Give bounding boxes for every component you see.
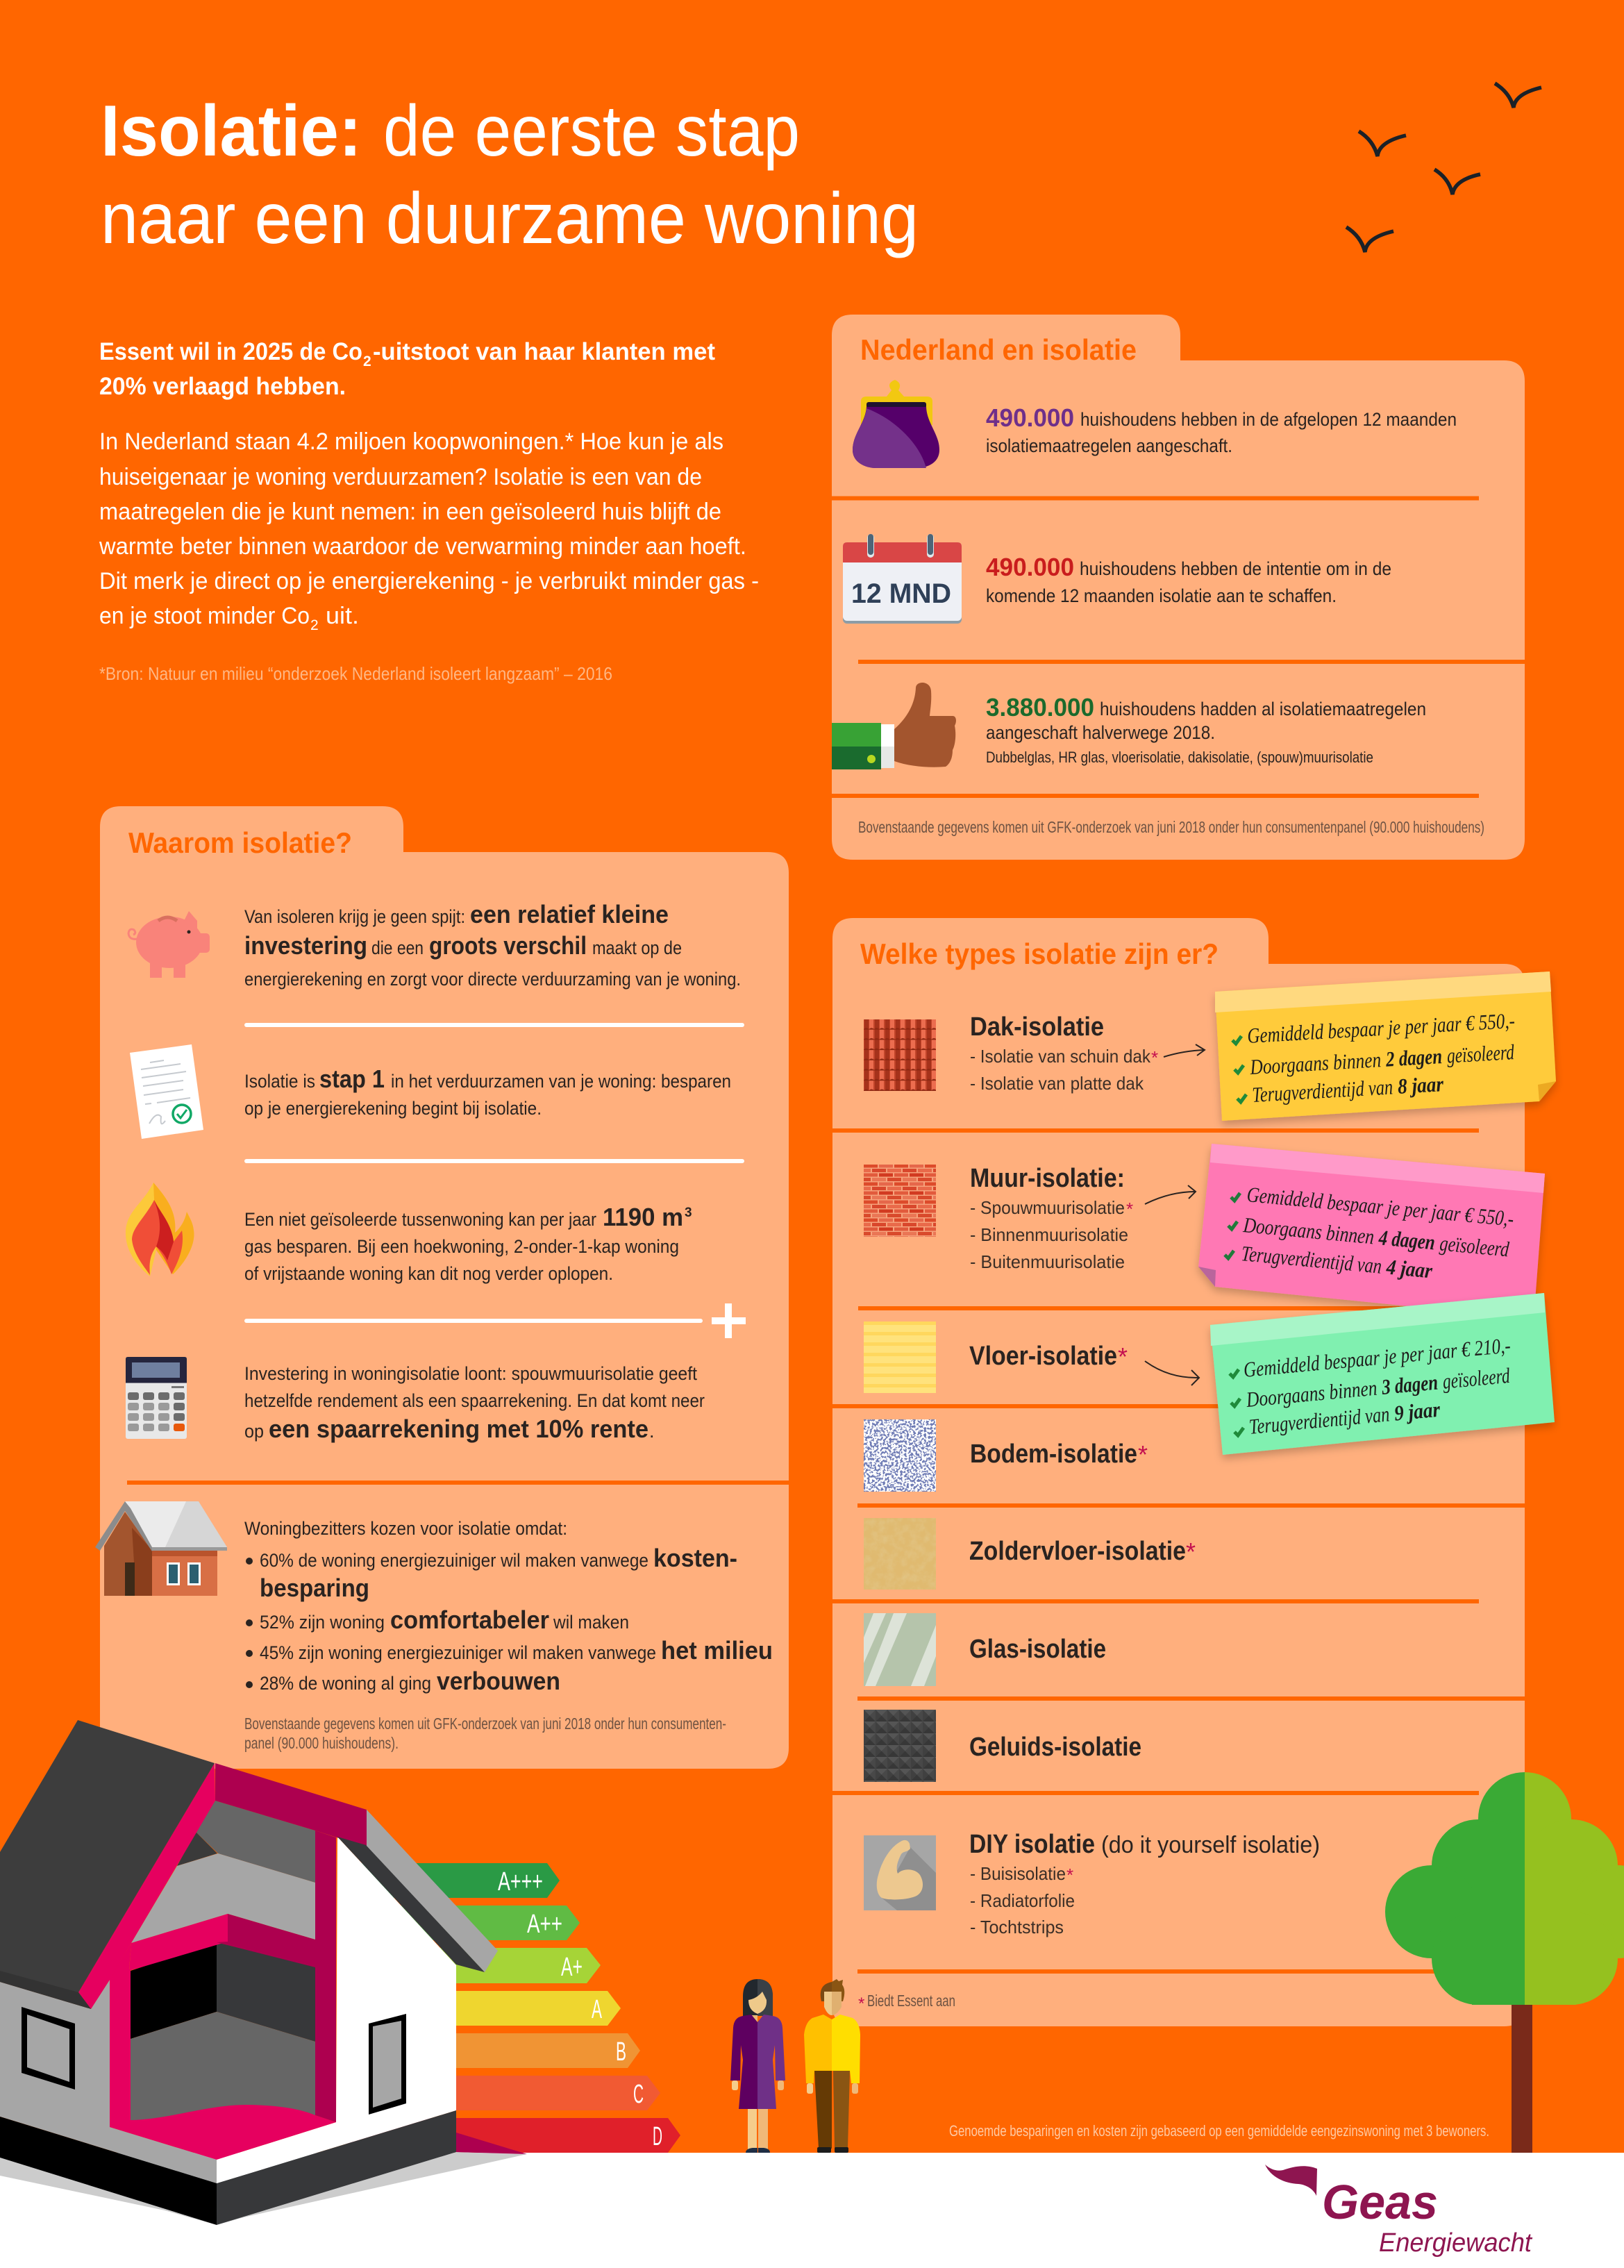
type: DIY isolatie: *: [1066, 1865, 1073, 1885]
icon: flying birds: [1346, 83, 1541, 252]
type: Vloer-isolatie: *: [1118, 1342, 1128, 1371]
stat: 490.000 afgelopen 12 maanden: huishoudens hebben in de afgelopen 12 maanden: [1080, 409, 1457, 430]
person: woman: [730, 1979, 785, 2153]
energy label bars: A+: [561, 1953, 583, 1982]
intro: bold statement: 2: [363, 353, 371, 369]
note: yellow Dak: Doorgaans binnen: [1249, 1047, 1382, 1079]
icon: piggy bank: [128, 911, 210, 978]
text: relatief kleine investering: investering: [244, 931, 367, 960]
text: 1190 m3: 3: [685, 1206, 692, 1220]
type: Muur-isolatie: - Buitenmuurisolatie: [970, 1251, 1125, 1272]
logo: Geas Energiewacht: Geas: [1322, 2175, 1438, 2229]
text: relatief kleine investering: die een: [371, 937, 424, 958]
panel footnote: panel (90.000 huishoudens).: [244, 1734, 399, 1752]
stat: 490.000 intentie: huishoudens hebben de intentie om in de: [1080, 558, 1391, 579]
text: redenen woningbezitters: het milieu: [661, 1636, 773, 1665]
text: stap 1: Isolatie is: [244, 1071, 315, 1092]
text: spaarrekening 10% rente: Investering in woningisolatie loont: spouwmuurisolatie geeft: [244, 1363, 697, 1384]
text: stap 1: in het verduurzamen van je woning: besparen: [391, 1071, 731, 1092]
intro: bold statement: 20% verlaagd hebben.: [99, 373, 346, 400]
text: redenen woningbezitters: 45% zijn woning energiezuiniger wil maken vanwege: [260, 1642, 656, 1663]
intro: paragraph: warmte beter binnen waardoor de verwarming minder aan hoeft.: [99, 533, 746, 560]
note: pink Muur: Terugverdientijd van: [1240, 1241, 1383, 1278]
intro: paragraph: en je stoot minder Co: [99, 603, 310, 629]
type: Dak-isolatie: - Isolatie van platte dak: [970, 1073, 1144, 1094]
logo: Geas Energiewacht: [1265, 2165, 1532, 2258]
text: relatief kleine investering: maakt op de: [592, 937, 682, 958]
text: stap 1: stap 1: [319, 1065, 385, 1093]
heading: Nederland en isolatie: [860, 333, 1137, 366]
note: yellow Dak: Terugverdientijd van: [1251, 1074, 1393, 1107]
panel footnote: [244, 1715, 726, 1752]
type: Bodem-isolatie: Bodem-isolatie: [970, 1440, 1137, 1469]
note: pink Muur: 4 dagen: [1378, 1225, 1436, 1255]
panel: Waarom isolatie?: [95, 806, 789, 1769]
text: 1190 m3: gas besparen. Bij een hoekwoning, 2-onder-1-kap woning: [244, 1236, 679, 1257]
swatch: dakpannen: [864, 1019, 936, 1091]
type: Dak-isolatie: [970, 1012, 1158, 1094]
note: pink Muur: [1198, 1144, 1545, 1319]
note: yellow Dak: 8 jaar: [1397, 1072, 1445, 1099]
note: green Vloer: 3 dagen: [1380, 1370, 1439, 1399]
type: DIY isolatie: - Tochtstrips: [970, 1917, 1064, 1937]
type: Bodem-isolatie: *: [1138, 1440, 1148, 1469]
text: redenen woningbezitters: Woningbezitters kozen voor isolatie omdat:: [244, 1518, 567, 1539]
arrow: [1164, 1044, 1205, 1057]
person: man: [804, 1979, 860, 2153]
text: spaarrekening 10% rente: een spaarrekening met 10% rente: [269, 1415, 648, 1443]
panel footnote: Bovenstaande gegevens komen uit GFK-onderzoek van juni 2018 onder hun consumenten-: [244, 1715, 726, 1733]
note: green Vloer: geïsoleerd: [1441, 1363, 1511, 1394]
stat: 3.880.000: aangeschaft halverwege 2018.: [986, 722, 1215, 743]
note: pink Muur: Gemiddeld bespaar je per jaar € 550,-: [1246, 1182, 1515, 1231]
intro: bold statement: [99, 338, 715, 400]
icon: signed document: [130, 1044, 203, 1139]
swatch: DIY spierarm: [864, 1835, 936, 1910]
type: Geluids-isolatie: Geluids-isolatie: [969, 1733, 1141, 1762]
intro: paragraph: In Nederland staan 4.2 miljoen koopwoningen.* Hoe kun je als: [99, 428, 723, 455]
arrow: [1145, 1185, 1196, 1204]
stat: 490.000 intentie: 490.000: [986, 553, 1074, 581]
panel: Nederland en isolatie: [832, 315, 1525, 860]
type: DIY isolatie: - Radiatorfolie: [970, 1890, 1075, 1911]
energy label bars: A++: [527, 1910, 562, 1939]
text: redenen woningbezitters: besparing: [260, 1574, 369, 1602]
note: green Vloer: Terugverdientijd van: [1248, 1401, 1391, 1439]
text: relatief kleine investering: Van isoleren krijg je geen spijt:: [244, 906, 465, 927]
text: relatief kleine investering: een relatief kleine: [470, 900, 669, 928]
text: spaarrekening 10% rente: op: [244, 1421, 264, 1442]
stat: 3.880.000: huishoudens hadden al isolatiemaatregelen: [1100, 699, 1426, 719]
type: Muur-isolatie: [970, 1164, 1133, 1272]
source note: *Bron: Natuur en milieu “onderzoek Nederland isoleert langzaam” – 2016: [99, 663, 612, 684]
text: spaarrekening 10% rente: [244, 1363, 705, 1443]
stat: 490.000 afgelopen 12 maanden: [986, 403, 1457, 456]
note: yellow Dak: [1215, 972, 1556, 1121]
arrow: [1145, 1361, 1199, 1385]
type: Dak-isolatie: - Isolatie van schuin dak: [970, 1046, 1151, 1067]
type: DIY isolatie: (do it yourself isolatie): [1101, 1832, 1320, 1858]
title: de eerste stap: [383, 91, 800, 172]
text: spaarrekening 10% rente: .: [649, 1421, 655, 1442]
intro: paragraph: maatregelen die je kunt nemen: in een geïsoleerd huis blijft de: [99, 499, 721, 525]
tree: [1385, 1772, 1624, 2153]
note: yellow Dak: 2 dagen: [1384, 1044, 1443, 1072]
type: Muur-isolatie: *: [1126, 1199, 1133, 1219]
heading: Welke types isolatie zijn er?: [860, 937, 1219, 970]
cutaway house illustration: [0, 1720, 527, 2225]
icon: flame: [126, 1183, 194, 1276]
text: relatief kleine investering: energierekening en zorgt voor directe verduurzaming van je woning.: [244, 969, 741, 990]
text: relatief kleine investering: groots verschil: [429, 931, 587, 960]
intro: bold statement: -uitstoot van haar klanten met: [373, 338, 715, 365]
icon: calculator: [126, 1357, 187, 1439]
intro: paragraph: 2: [310, 617, 319, 633]
stat: 490.000 afgelopen 12 maanden: isolatiemaatregelen aangeschaft.: [986, 435, 1232, 456]
icon: small house: [95, 1501, 227, 1596]
type: Dak-isolatie: Dak-isolatie: [970, 1012, 1104, 1042]
text: redenen woningbezitters: [244, 1518, 773, 1695]
note: yellow Dak: geïsoleerd: [1446, 1040, 1515, 1068]
type: Dak-isolatie: *: [1151, 1047, 1158, 1068]
stat: 490.000 intentie: [986, 553, 1391, 606]
text: redenen woningbezitters: 60% de woning energiezuiniger wil maken vanwege: [260, 1550, 648, 1571]
stat: 3.880.000: 3.880.000: [986, 693, 1094, 722]
swatch: geluid: [864, 1710, 936, 1782]
intro: bold statement: Essent wil in 2025 de Co: [99, 338, 362, 365]
title: naar een duurzame woning: [101, 178, 919, 259]
note: green Vloer: 9 jaar: [1393, 1397, 1441, 1426]
heading: Waarom isolatie?: [128, 826, 352, 859]
icon: calendar 12 MND: 12 MND: [851, 578, 951, 609]
swatch: bodem: [864, 1419, 936, 1492]
text: redenen woningbezitters: comfortabeler: [390, 1606, 549, 1634]
icon: calendar 12 MND: [843, 534, 962, 624]
note: yellow Dak: Gemiddeld bespaar je per jaar € 550,-: [1246, 1008, 1516, 1048]
type: Muur-isolatie: Muur-isolatie:: [970, 1164, 1125, 1193]
energy label bars: [347, 1863, 680, 2153]
title: [101, 91, 919, 259]
energy label bars: B: [616, 2037, 626, 2067]
type: DIY isolatie: DIY isolatie: [969, 1830, 1095, 1859]
intro: paragraph: [99, 428, 759, 633]
stat: 490.000 afgelopen 12 maanden: 490.000: [986, 403, 1074, 432]
icon: plus: [712, 1303, 746, 1338]
type: Muur-isolatie: - Spouwmuurisolatie: [970, 1197, 1125, 1218]
note: pink Muur: geïsoleerd: [1439, 1231, 1510, 1261]
intro: paragraph: huiseigenaar je woning verduurzamen? Isolatie is een van de: [99, 464, 702, 490]
type: Zoldervloer-isolatie: *: [1186, 1537, 1196, 1566]
energy label bars: C: [633, 2080, 644, 2109]
type: DIY isolatie: [969, 1830, 1320, 1937]
type: Zoldervloer-isolatie: Zoldervloer-isolatie: [969, 1537, 1186, 1566]
energy label bars: A: [592, 1995, 602, 2024]
intro: paragraph: Dit merk je direct op je energierekening - je verbruikt minder gas -: [99, 568, 759, 594]
stat: 3.880.000: Dubbelglas, HR glas, vloerisolatie, dakisolatie, (spouw)muurisolatie: [986, 749, 1373, 766]
text: spaarrekening 10% rente: hetzelfde rendement als een spaarrekening. En dat komt neer: [244, 1390, 705, 1411]
type: Glas-isolatie: Glas-isolatie: [969, 1635, 1106, 1664]
text: redenen woningbezitters: verbouwen: [437, 1667, 560, 1695]
note: green Vloer: [1210, 1293, 1555, 1455]
panel: Welke types isolatie zijn er?: [832, 918, 1525, 2026]
note: green Vloer: Gemiddeld bespaar je per jaar € 210,-: [1242, 1333, 1512, 1382]
note: green Vloer: Doorgaans binnen: [1245, 1376, 1378, 1412]
text: redenen woningbezitters: 28% de woning al ging: [260, 1673, 431, 1694]
footnote: biedt Essent aan: *: [858, 1994, 864, 2013]
text: 1190 m3: 1190 m: [603, 1203, 683, 1231]
icon: purse: [853, 380, 939, 468]
intro: paragraph: uit.: [326, 603, 359, 629]
icon: thumbs up: [832, 683, 956, 769]
text: 1190 m3: Een niet geïsoleerde tussenwoning kan per jaar: [244, 1209, 596, 1230]
swatch: glas: [864, 1613, 936, 1686]
footnote: biedt Essent aan: [858, 1992, 955, 2013]
note: pink Muur: 4 jaar: [1385, 1254, 1434, 1283]
type: DIY isolatie: - Buisisolatie: [970, 1863, 1066, 1884]
stat: 3.880.000: [986, 693, 1426, 766]
text: redenen woningbezitters: wil maken: [553, 1612, 629, 1633]
title: Isolatie:: [101, 91, 362, 172]
text: stap 1: [244, 1065, 731, 1119]
text: relatief kleine investering: [244, 900, 741, 990]
text: 1190 m3: [244, 1203, 692, 1284]
note: pink Muur: Doorgaans binnen: [1242, 1212, 1375, 1249]
energy label bars: D: [653, 2122, 662, 2151]
text: stap 1: op je energierekening begint bij isolatie.: [244, 1098, 542, 1119]
swatch: vloer: [864, 1321, 936, 1393]
logo: Geas Energiewacht: Energiewacht: [1379, 2228, 1532, 2258]
stat: 490.000 intentie: komende 12 maanden isolatie aan te schaffen.: [986, 585, 1337, 606]
text: redenen woningbezitters: kosten-: [653, 1544, 737, 1572]
footnote: biedt Essent aan: Biedt Essent aan: [867, 1992, 955, 2010]
energy label bars: A+++: [498, 1867, 543, 1896]
text: redenen woningbezitters: 52% zijn woning: [260, 1612, 385, 1633]
swatch: bakstenen: [864, 1165, 936, 1237]
swatch: zoldervloer: [864, 1518, 936, 1590]
text: 1190 m3: of vrijstaande woning kan dit nog verder oplopen.: [244, 1263, 613, 1284]
type: Muur-isolatie: - Binnenmuurisolatie: [970, 1224, 1128, 1245]
type: Vloer-isolatie: Vloer-isolatie: [969, 1342, 1117, 1371]
